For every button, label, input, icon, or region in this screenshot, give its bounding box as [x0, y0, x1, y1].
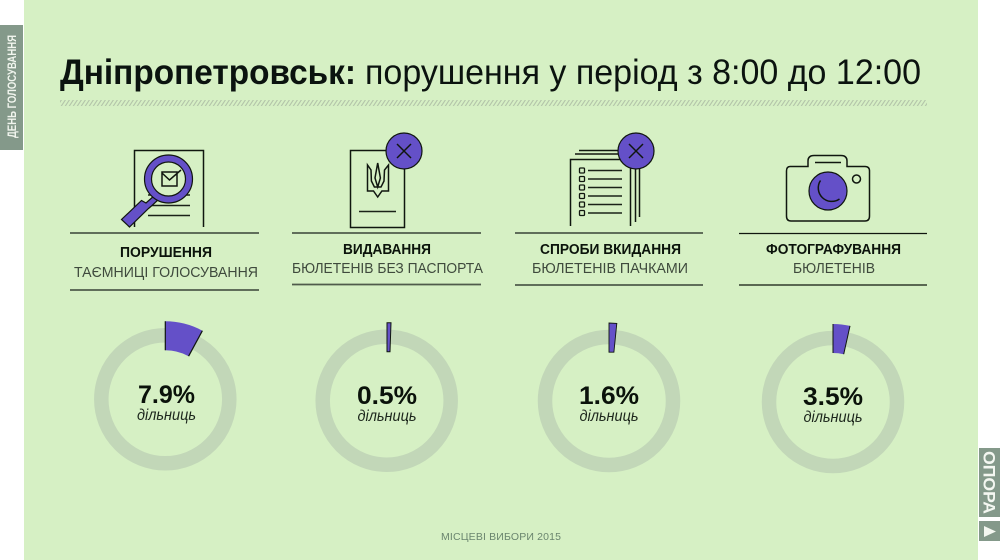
label rule and text — [70, 233, 259, 290]
brand tab — [979, 448, 1000, 541]
title: порушення у період з 8:00 до 12:00 — [365, 53, 921, 92]
donut: 1.6%: 1.6% — [579, 382, 639, 410]
label rule and text: БЮЛЕТЕНІВ ПАЧКАМИ — [532, 261, 688, 277]
panel: ballots without passport — [292, 133, 483, 465]
label rule and text: ФОТОГРАФУВАННЯ — [766, 242, 901, 258]
donut: 1.6%: дільниць — [580, 408, 638, 425]
side tab: voting day — [0, 25, 23, 150]
donut: 0.5%: дільниць — [358, 408, 416, 425]
label rule and text: ТАЄМНИЦІ ГОЛОСУВАННЯ — [74, 265, 258, 281]
donut: 3.5%: 3.5% — [803, 383, 863, 411]
panel: secrecy violation — [70, 150, 259, 463]
label rule and text — [292, 233, 483, 284]
label rule and text: БЮЛЕТЕНІВ — [793, 261, 875, 277]
icon: magnifier over ballot — [122, 150, 204, 227]
brand tab: ОПОРА — [980, 451, 998, 514]
donut: 7.9%: дільниць — [137, 407, 196, 424]
donut: 7.9% — [101, 321, 229, 463]
icon: stack of ballots with cross — [570, 133, 654, 226]
panel: ballot stuffing — [515, 133, 703, 465]
icon: camera — [786, 156, 870, 221]
donut: 1.6% — [545, 323, 673, 465]
donut: 3.5% — [769, 324, 897, 466]
label rule and text — [515, 233, 703, 285]
side tab: voting day: ДЕНЬ ГОЛОСУВАННЯ — [7, 35, 19, 138]
label rule and text: БЮЛЕТЕНІВ БЕЗ ПАСПОРТА — [292, 261, 483, 277]
title: Дніпропетровськ: — [60, 53, 356, 92]
icon: passport with cross — [350, 133, 422, 228]
donut: 0.5%: 0.5% — [357, 382, 417, 410]
donut: 7.9%: 7.9% — [138, 381, 195, 409]
donut: 3.5%: дільниць — [804, 409, 862, 426]
label rule and text: ПОРУШЕННЯ — [120, 245, 212, 261]
label rule and text: СПРОБИ ВКИДАННЯ — [540, 242, 681, 258]
label rule and text — [739, 234, 927, 285]
label rule and text: ВИДАВАННЯ — [343, 242, 431, 258]
footer text: МІСЦЕВІ ВИБОРИ 2015 — [441, 531, 561, 543]
donut: 0.5% — [323, 323, 451, 465]
panel: photographing ballots — [739, 156, 927, 466]
